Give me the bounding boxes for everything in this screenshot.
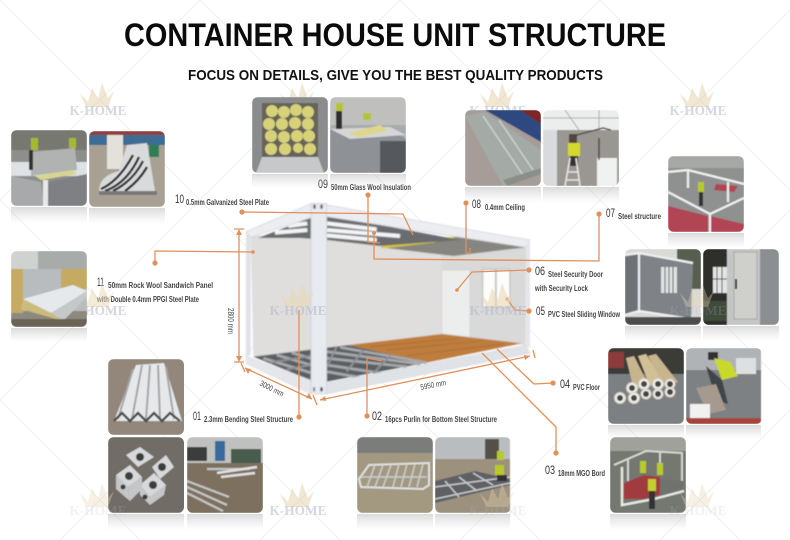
photo: container with window [625, 249, 701, 325]
label 11: with Double 0.4mm PPGI Steel Plate [96, 295, 199, 304]
watermark K-HOME [670, 283, 726, 318]
leader 06 [455, 267, 532, 292]
label 07: 07 [606, 206, 615, 220]
label 04 [560, 377, 600, 392]
watermark K-HOME [280, 83, 314, 107]
door [442, 270, 470, 337]
label 10: 10 [175, 192, 184, 206]
watermark K-HOME [70, 283, 126, 318]
label 03 [545, 463, 605, 478]
label 11: 11 [97, 275, 104, 289]
label 09: 50mm Glass Wool Insulation [331, 183, 411, 192]
photo: steel security door [703, 249, 779, 325]
leader 11 [152, 250, 255, 266]
watermark K-HOME [670, 83, 726, 118]
leader 02 [364, 358, 382, 419]
label 11: 50mm Rock Wool Sandwich Panel [108, 281, 213, 290]
dimension 2800 [234, 229, 244, 362]
dimension 3000 [241, 363, 317, 405]
photo: worker installing ceiling [543, 110, 619, 186]
label 06 [534, 264, 603, 293]
watermark K-HOME [70, 483, 126, 518]
photo: installing glass wool on roof [330, 97, 406, 173]
photo: workers fitting roof panel [11, 130, 87, 206]
watermark K-HOME: K-HOME [670, 503, 726, 518]
label 04: PVC Floor [573, 383, 600, 392]
label 05: PVC Steel Sliding Window [548, 310, 621, 319]
watermark K-HOME [670, 483, 726, 518]
label 02: 02 [372, 409, 382, 423]
photo: workers assembling purlins [435, 437, 510, 513]
label 11 [96, 275, 213, 304]
leader 04 [497, 349, 556, 386]
photo: PVC floor rolls [608, 348, 684, 424]
label 04: 04 [560, 377, 570, 391]
window [483, 269, 510, 307]
subtitle: FOCUS ON DETAILS, GIVE YOU THE BEST QUALITY PRODUCTS [188, 67, 603, 84]
photo: steel parts on site [187, 437, 263, 513]
label 09 [318, 177, 411, 192]
walls [251, 235, 526, 357]
watermark K-HOME [270, 483, 326, 518]
labels [96, 177, 661, 478]
leader 07 [372, 211, 602, 261]
roof purlins [258, 215, 460, 246]
watermark K-HOME: K-HOME [470, 303, 526, 318]
photo: corner steel castings [108, 437, 185, 513]
leader 09 [365, 192, 380, 243]
leader 05 [505, 297, 532, 314]
watermark K-HOME [470, 283, 526, 318]
photo: purlin frame on ground [357, 437, 433, 513]
background watermarks [70, 83, 726, 518]
title: CONTAINER HOUSE UNIT STRUCTURE [124, 17, 666, 53]
label 03: 18mm MGO Bord [558, 469, 605, 478]
photo: ceiling panels stack [465, 110, 541, 186]
photo reflections [11, 174, 779, 530]
watermark K-HOME: K-HOME [470, 503, 526, 518]
watermark K-HOME: K-HOME [70, 103, 126, 118]
label 08: 0.4mm Ceiling [485, 203, 525, 212]
label 09: 09 [318, 177, 328, 191]
watermark K-HOME: K-HOME [70, 503, 126, 518]
label 08 [472, 197, 525, 212]
watermark K-HOME [270, 283, 326, 318]
wood floor [348, 334, 522, 363]
watermark K-HOME [70, 83, 126, 118]
leader 03 [482, 353, 559, 456]
label 08: 08 [472, 197, 481, 211]
steel floor frame [253, 345, 427, 382]
label 01: 2.3mm Bending Steel Structure [204, 415, 293, 424]
dimension label 5950: 5950 mm [420, 378, 447, 392]
label 05 [536, 304, 621, 319]
watermark K-HOME: K-HOME [670, 103, 726, 118]
leader 08 [463, 200, 470, 253]
watermark K-HOME: K-HOME [670, 303, 726, 318]
watermark K-HOME: K-HOME [270, 303, 326, 318]
dimension label 3000: 3000 mm [258, 379, 286, 399]
ceiling [380, 237, 526, 256]
watermark K-HOME: K-HOME [270, 503, 326, 518]
watermark K-HOME [470, 483, 526, 518]
label 10: 0.5mm Galvanized Steel Plate [186, 198, 269, 207]
label 07: Steel structure [618, 212, 661, 221]
photo: workers laying MGO board [610, 437, 686, 513]
overlay watermarks [70, 283, 726, 518]
photo: bending steel beams [108, 359, 185, 435]
label 06: Steel Security Door [548, 270, 603, 279]
label 01: 01 [193, 409, 201, 423]
label 02 [372, 409, 497, 424]
label 05: 05 [536, 304, 545, 318]
label 03: 03 [545, 463, 555, 477]
container house illustration [246, 203, 530, 394]
label 06: with Security Lock [534, 284, 588, 293]
frame [246, 203, 530, 247]
label 07 [606, 206, 661, 221]
dimension label 2800: 2800 mm [226, 308, 235, 334]
leader lines and dimension arrows [152, 192, 602, 456]
watermark K-HOME: K-HOME [70, 303, 126, 318]
photo: glass wool rolls in container [252, 97, 328, 173]
label 06: 06 [535, 264, 545, 278]
watermark K-HOME [470, 83, 526, 118]
watermark K-HOME: K-HOME [470, 103, 526, 118]
dimension 5950 [320, 350, 535, 401]
photo: steel structure frame [668, 156, 744, 232]
leader 10 [239, 209, 413, 235]
label 01 [193, 409, 293, 424]
photo: worker laying floor [686, 348, 761, 424]
photo: rock wool sandwich panel [11, 251, 87, 327]
photo: stacked steel plates [89, 131, 165, 207]
leader 01 [296, 310, 302, 420]
label 02: 16pcs Purlin for Bottom Steel Structure [385, 415, 497, 424]
label 10 [175, 192, 269, 207]
